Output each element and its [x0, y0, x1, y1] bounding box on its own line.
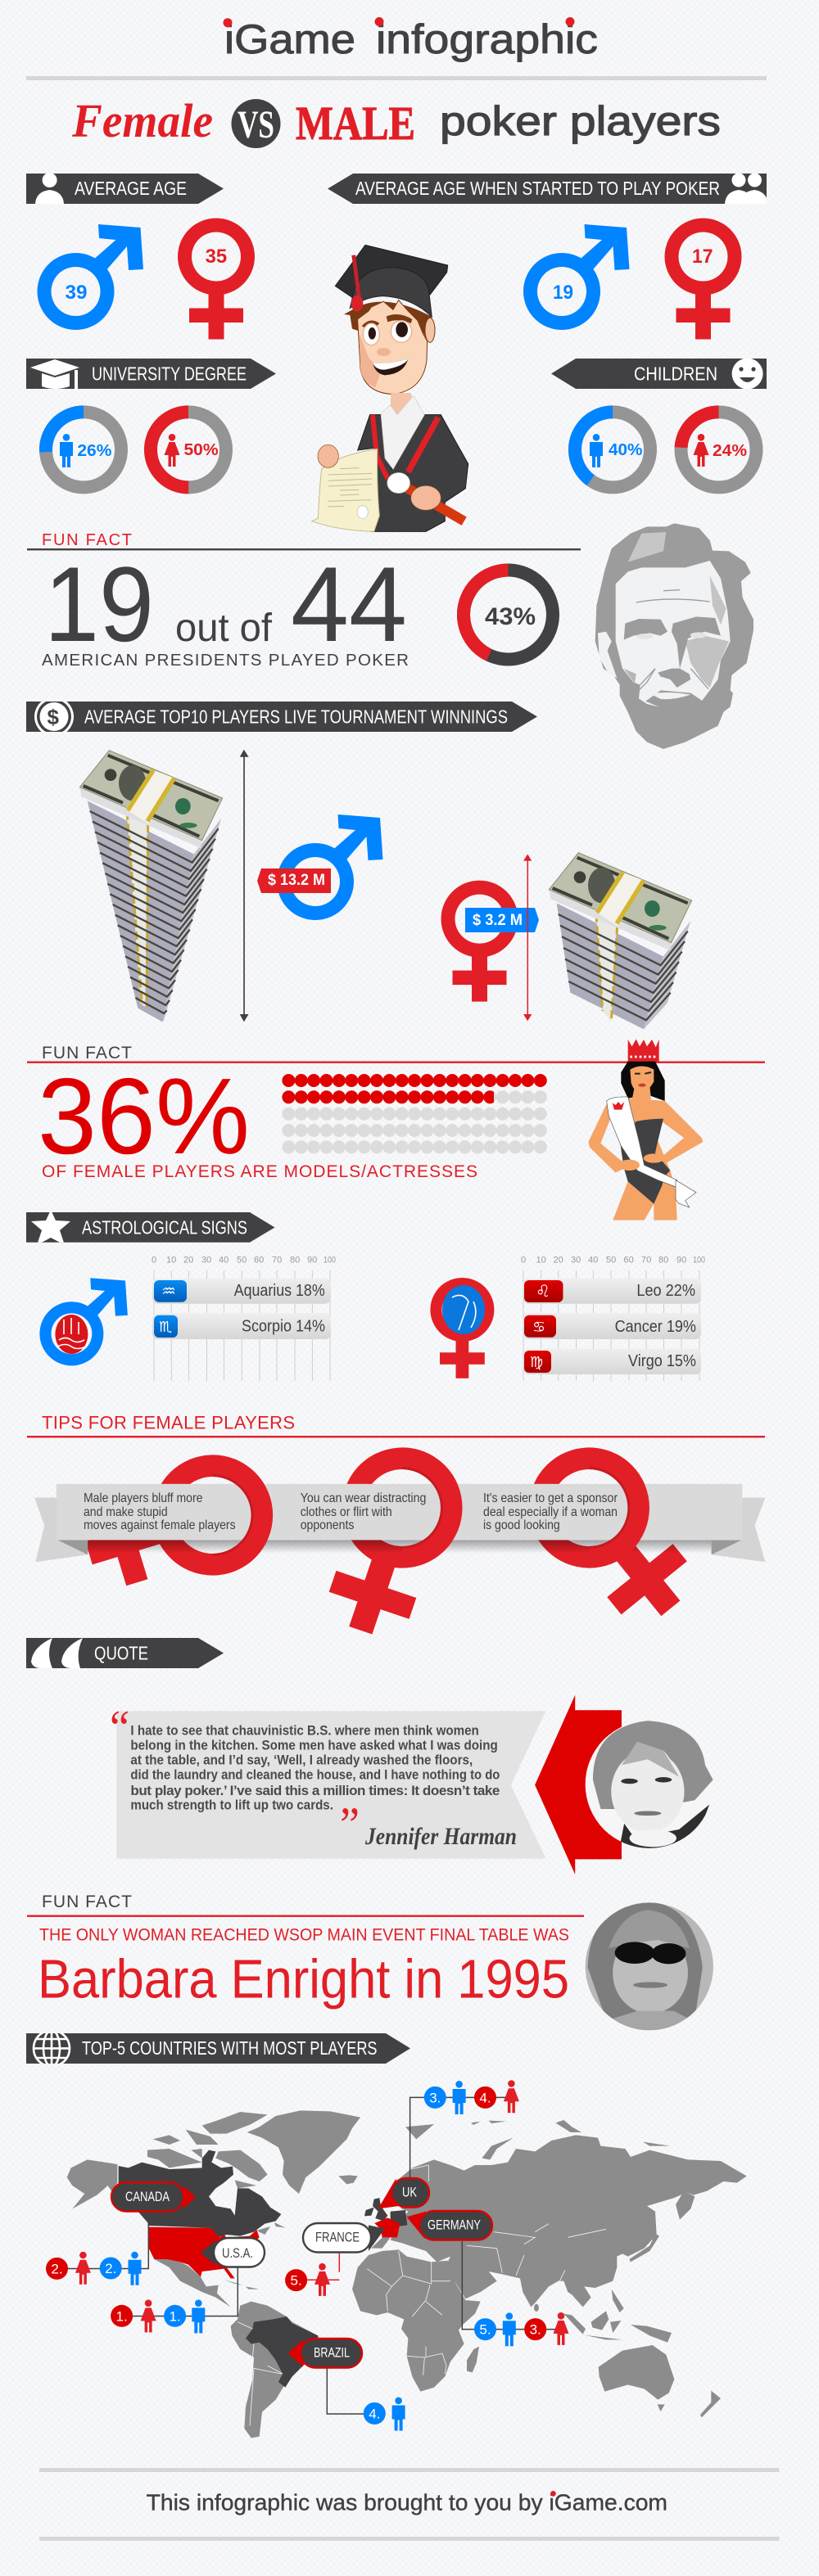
- rankings: Canada: 2.: [105, 2261, 116, 2276]
- fun fact: 36%: [38, 1056, 477, 1181]
- callout: Canada: CANADA: [125, 2189, 170, 2204]
- female symbol with 3.2M label: $ 3.2 M: [473, 912, 523, 929]
- panel: quote: “: [110, 1701, 129, 1755]
- male astrology bar chart: 10: [166, 1256, 176, 1265]
- panel: quote: [110, 1701, 546, 1859]
- callout: Germany: GERMANY: [428, 2217, 481, 2233]
- heading: average age when started: [328, 174, 768, 204]
- female astrology bar chart: 60: [624, 1256, 634, 1265]
- callout: Germany: [407, 2211, 492, 2240]
- donut: 43%: 43%: [485, 603, 536, 630]
- rankings: Brazil: [364, 2397, 405, 2431]
- illustration: small money stack: [549, 853, 692, 1029]
- panel: tips ribbon with female symbols: You can wear distracting: [301, 1491, 426, 1505]
- rankings: Canada: [46, 2252, 141, 2285]
- heading: tournament winnings: AVERAGE TOP10 PLAYERS LIVE TOURNAMENT WINNINGS: [84, 706, 508, 727]
- heading: children: [551, 359, 767, 390]
- donut: male children 40%: [575, 412, 650, 487]
- fun fact: 19 out of 44: 44: [291, 544, 407, 664]
- panel: tips ribbon with female symbols: opponents: [301, 1518, 354, 1532]
- callout: UK: [378, 2178, 429, 2208]
- panel: quote: I hate to see that chauvinistic B.S. where men think women: [130, 1723, 479, 1739]
- world map: americas: [67, 2110, 391, 2438]
- rankings: UK: 4.: [479, 2090, 491, 2105]
- fun fact: 36%: OF FEMALE PLAYERS ARE MODELS/ACTRESSES: [42, 1162, 477, 1181]
- heading: tournament winnings: $: [48, 705, 59, 729]
- title: infographic: [376, 16, 598, 62]
- female astrology bar chart: 10: [536, 1256, 546, 1265]
- footer credit: This infographic was brought to you by iGame.com: [147, 2490, 667, 2515]
- heading: top-5 countries: TOP-5 COUNTRIES WITH MOST PLAYERS: [82, 2037, 377, 2059]
- photo: Jennifer Harman: [585, 1721, 713, 1848]
- fun fact: 19 out of 44: out of: [175, 607, 273, 650]
- female astrology bar chart: 20: [554, 1256, 563, 1265]
- heading: tournament winnings: [26, 702, 537, 732]
- illustration: model with crown: [588, 1039, 703, 1220]
- rankings: USA: 1.: [170, 2308, 181, 2324]
- rankings: Brazil: 4.: [369, 2406, 380, 2421]
- male astrology bar chart: 30: [201, 1256, 211, 1265]
- heading: children: CHILDREN: [634, 363, 717, 385]
- arrow: tall height: [240, 750, 249, 1022]
- male symbol with aquarius emblem: [39, 1278, 128, 1365]
- male symbol 39: 39: [66, 282, 87, 304]
- donut: male university 26%: [46, 412, 121, 487]
- rankings: Germany: [474, 2312, 568, 2346]
- donut: female children 24%: [681, 412, 757, 487]
- fun fact heading: models: FUN FACT: [42, 1044, 132, 1062]
- female astrology bar chart: Cancer 19%: [615, 1318, 696, 1336]
- panel: quote: did the laundry and cleaned the house, and I have nothing to do: [130, 1767, 500, 1783]
- rankings: USA: [111, 2299, 205, 2333]
- male astrology bar chart: 40: [219, 1256, 229, 1265]
- fun fact: 19 out of 44: [42, 544, 409, 670]
- male astrology bar chart: 0: [152, 1256, 156, 1265]
- callout: Canada: [111, 2182, 196, 2212]
- photo: Barbara Enright: [585, 1902, 713, 2030]
- female astrology bar chart: 70: [641, 1256, 651, 1265]
- subtitle: female vs male poker players: poker players: [440, 98, 721, 144]
- fun fact: Barbara Enright: Barbara Enright in 1995: [38, 1949, 569, 2010]
- subtitle: female vs male poker players: MALE: [296, 97, 415, 150]
- panel: tips ribbon with female symbols: Male players bluff more: [84, 1491, 202, 1505]
- panel: tips ribbon with female symbols: It's easier to get a sponsor: [483, 1491, 618, 1505]
- panel: tips ribbon with female symbols: [34, 1447, 765, 1634]
- panel: quote: much strength to lift up two cards.: [130, 1798, 333, 1813]
- subtitle: female vs male poker players: [71, 94, 721, 150]
- fun fact: 36%: 36%: [38, 1056, 250, 1176]
- heading: university degree: UNIVERSITY DEGREE: [92, 363, 247, 385]
- heading: tips for female players: TIPS FOR FEMALE PLAYERS: [42, 1413, 295, 1433]
- male astrology bar chart: 60: [254, 1256, 264, 1265]
- male symbol 19: [523, 224, 629, 330]
- fun fact: 19 out of 44: 19: [44, 544, 154, 664]
- female astrology bar chart: 100: [693, 1256, 705, 1265]
- callout: UK: UK: [402, 2185, 417, 2200]
- female astrology bar chart: ♍: [530, 1354, 543, 1371]
- heading: astrological signs: ASTROLOGICAL SIGNS: [82, 1216, 247, 1238]
- female astrology bar chart: 30: [571, 1256, 581, 1265]
- heading: top-5 countries: [26, 2033, 410, 2064]
- title: iGame: [224, 16, 355, 62]
- panel: quote: Jennifer Harman: [364, 1823, 517, 1850]
- rankings: Germany: 3.: [530, 2322, 541, 2338]
- male astrology bar chart: 50: [237, 1256, 247, 1265]
- rankings: France: 5.: [291, 2273, 302, 2289]
- rankings: UK: [424, 2080, 519, 2114]
- fun fact heading: Barbara: FUN FACT: [42, 1893, 132, 1911]
- panel: quote: but play poker.’ I’ve said this a million times: It doesn’t take: [130, 1783, 500, 1798]
- female astrology bar chart: 40: [588, 1256, 598, 1265]
- male astrology bar chart: 70: [272, 1256, 282, 1265]
- rankings: France: [285, 2263, 330, 2296]
- female astrology bar chart: Leo 22%: [636, 1282, 695, 1300]
- male astrology bar chart: 80: [290, 1256, 300, 1265]
- fun fact: 19 out of 44: AMERICAN PRESIDENTS PLAYED POKER: [42, 651, 409, 670]
- male astrology bar chart: 90: [307, 1256, 317, 1265]
- panel: quote: at the table, and I’d say, ‘Well, I already washed the floors,: [130, 1753, 473, 1768]
- subtitle: female vs male poker players: Female: [71, 94, 213, 147]
- panel: tips ribbon with female symbols: clothes or flirt with: [301, 1505, 392, 1519]
- heading: average age: [26, 173, 224, 204]
- callout: USA: [201, 2238, 265, 2267]
- callout: Brazil: BRAZIL: [314, 2344, 350, 2360]
- male symbol with 13.2M label: [257, 814, 383, 920]
- female symbol 17: [665, 218, 742, 339]
- dot chart: 36 percent: [282, 1074, 547, 1153]
- panel: quote: ”: [340, 1798, 360, 1852]
- female astrology bar chart: 50: [606, 1256, 616, 1265]
- donut: male university 26%: 26%: [77, 442, 112, 460]
- male symbol 39: [37, 224, 143, 330]
- panel: tips ribbon with female symbols: is good looking: [483, 1518, 560, 1532]
- rankings: USA: 1.: [116, 2308, 128, 2324]
- heading: astrological signs: [26, 1212, 275, 1243]
- callout: France: FRANCE: [315, 2230, 360, 2245]
- female astrology bar chart: [521, 1256, 705, 1381]
- female astrology bar chart: 0: [521, 1256, 526, 1265]
- panel: tips ribbon with female symbols: moves against female players: [84, 1518, 236, 1532]
- title: [223, 16, 598, 62]
- male symbol with 13.2M label: $ 13.2 M: [268, 872, 325, 889]
- female astrology bar chart: Virgo 15%: [628, 1352, 696, 1370]
- male symbol 19: 19: [553, 282, 573, 304]
- rankings: Canada: 2.: [51, 2261, 63, 2276]
- donut: male children 40%: 40%: [609, 441, 643, 459]
- illustration: tall money stack: [79, 751, 223, 1022]
- donut: female children 24%: 24%: [713, 442, 747, 460]
- illustration: graduate: [312, 245, 468, 531]
- arrow: small height: [523, 855, 532, 1021]
- donut: 43%: [464, 570, 553, 660]
- female symbol 35: [178, 218, 255, 339]
- subtitle: female vs male poker players: VS: [238, 103, 274, 147]
- female astrology bar chart: 80: [658, 1256, 668, 1265]
- female astrology bar chart: 90: [676, 1256, 686, 1265]
- male astrology bar chart: Scorpio 14%: [242, 1318, 325, 1336]
- fun fact: Barbara Enright: [38, 1926, 569, 2010]
- heading: university degree: [26, 359, 276, 389]
- female astrology bar chart: ♋: [532, 1319, 545, 1336]
- callout: France: [303, 2223, 385, 2253]
- male astrology bar chart: 100: [324, 1256, 336, 1265]
- callout: USA: U.S.A.: [222, 2245, 253, 2261]
- male astrology bar chart: Aquarius 18%: [234, 1282, 325, 1300]
- heading: average age when started: AVERAGE AGE WHEN STARTED TO PLAY POKER: [355, 178, 720, 199]
- connector lines: [66, 2097, 557, 2414]
- arrow: red quote pointer: [535, 1695, 622, 1874]
- female symbol with leo emblem: [430, 1278, 494, 1378]
- illustration: Lincoln portrait: [595, 523, 753, 749]
- heading: quote: QUOTE: [94, 1642, 148, 1663]
- world map: europe, africa, asia and oceania: [352, 2120, 747, 2417]
- panel: tips ribbon with female symbols: deal especially if a woman: [483, 1505, 618, 1519]
- panel: tips ribbon with female symbols: and make stupid: [84, 1505, 168, 1519]
- female astrology bar chart: ♌: [536, 1281, 550, 1301]
- rankings: UK: 3.: [429, 2090, 441, 2105]
- female symbol 17: 17: [692, 246, 713, 268]
- callout: Brazil: [288, 2339, 362, 2367]
- male astrology bar chart: ♒: [161, 1281, 176, 1301]
- fun fact: Barbara Enright: THE ONLY WOMAN REACHED WSOP MAIN EVENT FINAL TABLE WAS: [39, 1926, 569, 1945]
- heading: quote: [26, 1638, 224, 1668]
- female symbol 35: 35: [206, 246, 227, 268]
- rankings: Germany: 5.: [479, 2322, 491, 2338]
- male astrology bar chart: 20: [183, 1256, 193, 1265]
- male astrology bar chart: ♏: [159, 1319, 172, 1336]
- donut: female university 50%: 50%: [183, 441, 219, 459]
- female symbol with 3.2M label: [441, 881, 539, 1002]
- male astrology bar chart: [152, 1256, 336, 1381]
- donut: female university 50%: [151, 412, 226, 487]
- heading: average age: AVERAGE AGE: [75, 178, 187, 199]
- panel: quote: belong in the kitchen. Some men have asked what I was doing: [130, 1737, 498, 1753]
- fun fact heading: presidents: FUN FACT: [42, 531, 132, 549]
